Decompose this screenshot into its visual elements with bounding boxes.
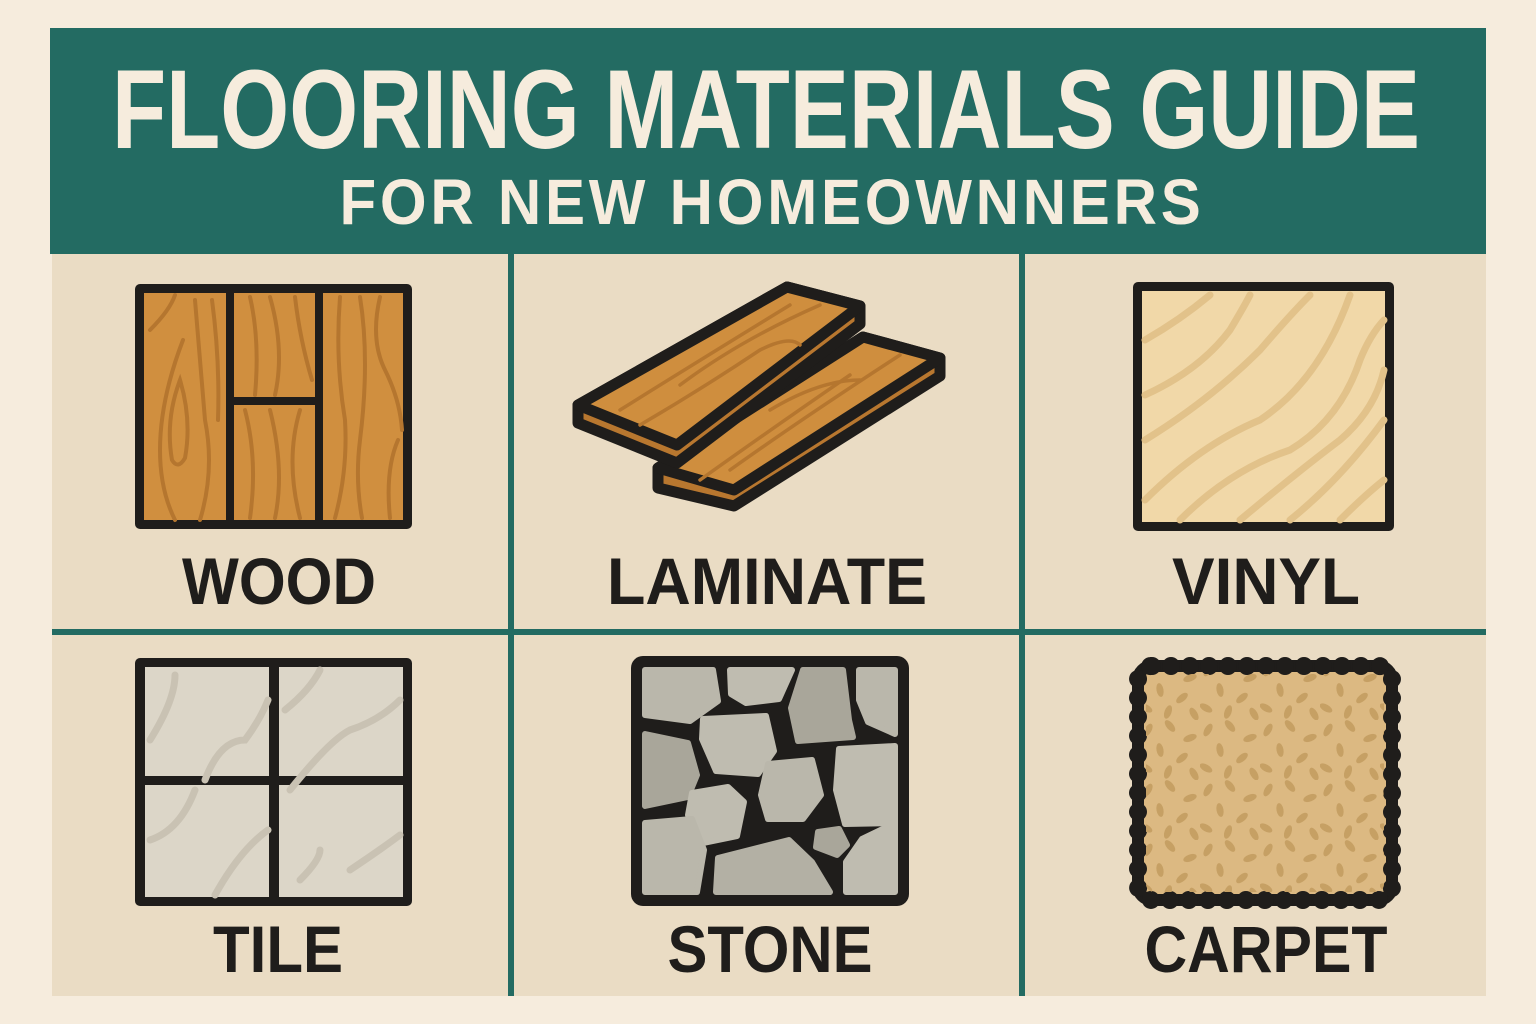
panel: carpet — [1138, 666, 1392, 986]
label: tile: TILE — [213, 912, 343, 986]
icon: laminate planks — [578, 287, 940, 506]
icon: tiles — [135, 658, 412, 906]
panel: laminate — [578, 287, 940, 618]
icon: carpet swatch — [1138, 666, 1392, 900]
icon: wood planks — [135, 284, 412, 529]
label: wood: WOOD — [182, 544, 376, 618]
icon: stone pavers — [631, 656, 909, 906]
grid background — [52, 254, 1486, 996]
icon: vinyl sheet — [1133, 282, 1394, 531]
label: carpet: CARPET — [1144, 912, 1388, 986]
label: laminate: LAMINATE — [607, 544, 927, 618]
subtitle: FOR NEW HOMEOWNNERS — [340, 166, 1204, 238]
panel: tile — [135, 658, 412, 986]
label: vinyl: VINYL — [1172, 544, 1360, 618]
panel: vinyl — [1133, 282, 1394, 618]
panel: wood — [135, 284, 412, 618]
header banner — [50, 28, 1486, 254]
label: stone: STONE — [668, 912, 872, 986]
panel: stone — [631, 656, 909, 986]
